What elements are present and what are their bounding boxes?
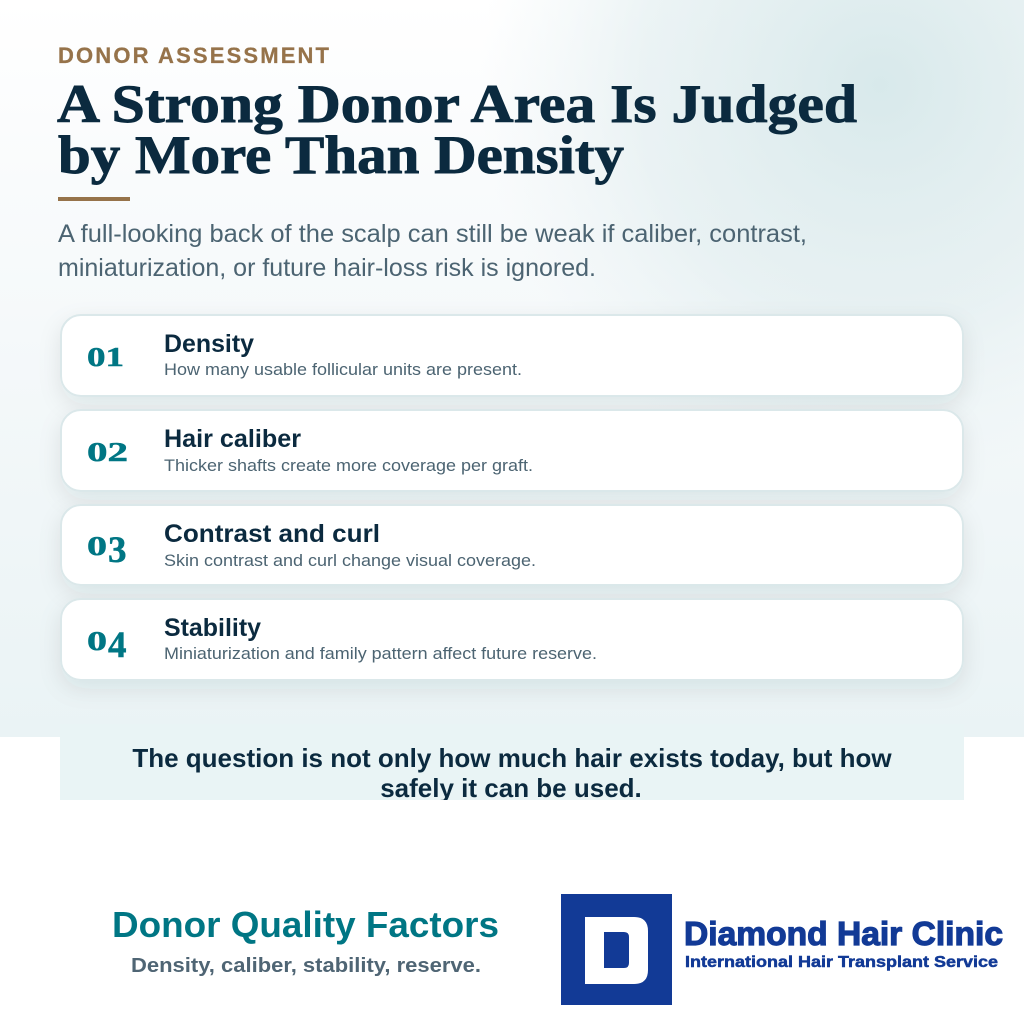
icon: blue square with D <box>561 894 672 1005</box>
heading hair caliber: Hair caliber <box>164 425 301 453</box>
intro text: miniaturization, or future hair-loss risk is ignored. <box>58 254 596 282</box>
intro text <box>58 220 807 282</box>
number 03: 3 <box>108 530 126 571</box>
logo wordmark: Diamond Hair Clinic <box>684 915 1003 952</box>
description hair caliber: Thicker shafts create more coverage per graft. <box>164 456 533 475</box>
number 01: 01 <box>87 342 124 372</box>
panel: factor 02 hair caliber <box>61 410 963 491</box>
background panel <box>0 0 1024 737</box>
number 04: 0 <box>87 626 107 656</box>
title accent rule <box>58 197 130 201</box>
description density: How many usable follicular units are present. <box>164 360 522 379</box>
number 02: 02 <box>87 437 128 467</box>
title: by More Than Density <box>58 125 624 185</box>
footer subheading: Density, caliber, stability, reserve. <box>131 955 481 977</box>
number 03: 0 <box>87 531 107 561</box>
footer heading: Donor Quality Factors <box>112 904 499 945</box>
logo: Diamond Hair Clinic <box>561 894 1003 1005</box>
callout <box>60 737 964 800</box>
heading stability: Stability <box>164 614 261 642</box>
callout: safely it can be used. <box>380 773 642 803</box>
panel: factor 03 contrast and curl <box>61 505 963 585</box>
title: A Strong Donor Area Is Judged <box>57 74 857 134</box>
heading density: Density <box>164 330 254 358</box>
description stability: Miniaturization and family pattern affect future reserve. <box>164 644 597 663</box>
number 04: 4 <box>108 625 126 666</box>
title <box>57 74 857 185</box>
description contrast and curl: Skin contrast and curl change visual coverage. <box>164 551 536 570</box>
callout: The question is not only how much hair exists today, but how <box>132 743 892 773</box>
logo tagline: International Hair Transplant Service <box>685 954 998 971</box>
heading contrast and curl: Contrast and curl <box>164 520 380 548</box>
intro text: A full-looking back of the scalp can still be weak if caliber, contrast, <box>58 220 807 248</box>
panel: factor 04 stability <box>61 599 963 680</box>
panel: factor 01 density <box>61 315 963 396</box>
eyebrow label: DONOR ASSESSMENT <box>58 43 330 68</box>
